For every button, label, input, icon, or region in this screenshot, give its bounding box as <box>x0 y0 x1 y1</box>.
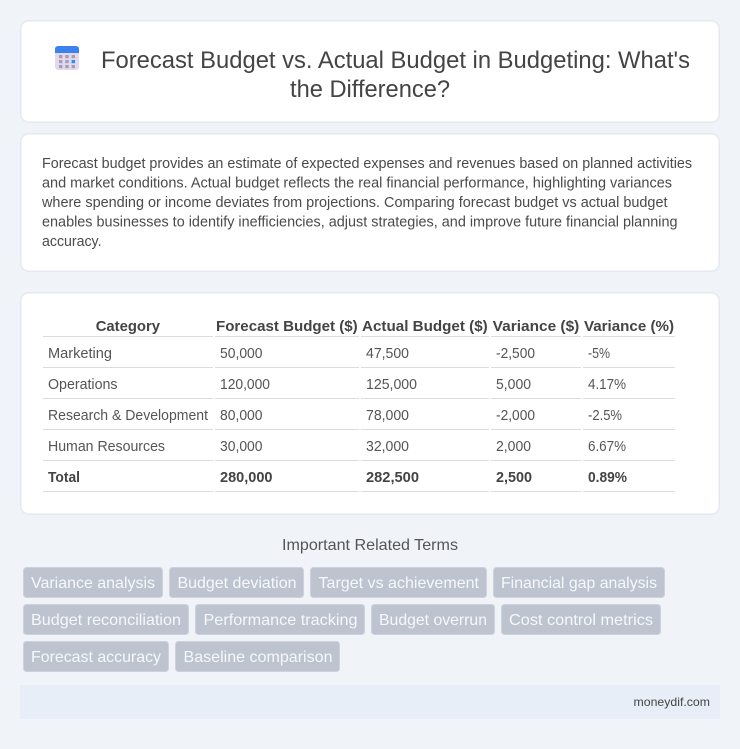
summary text <box>41 156 692 250</box>
tag: forecast accuracy <box>24 642 168 672</box>
panel: related term tags <box>24 568 664 672</box>
footer: moneydif.com <box>634 695 710 709</box>
row: operations: 125,000 <box>366 377 417 393</box>
panel: title header <box>21 21 719 122</box>
row: marketing: -5% <box>588 346 610 362</box>
row: human resources <box>48 439 626 455</box>
table header row: Variance ($) <box>493 318 579 335</box>
row: research and development <box>48 408 622 424</box>
summary text: accuracy. <box>42 234 102 250</box>
row: operations: 120,000 <box>220 377 270 393</box>
summary text: and market conditions. Actual budget reflects the real financial performance, highlighting variances <box>42 176 672 192</box>
tag: target vs achievement <box>310 568 486 598</box>
tag: budget overrun <box>372 604 494 634</box>
tag: baseline comparison: Baseline comparison <box>184 649 332 666</box>
title: the Difference? <box>290 76 450 103</box>
row: research and development: Research & Development <box>48 408 208 424</box>
table header row: Variance (%) <box>584 318 674 335</box>
panel: budget table <box>21 293 719 514</box>
tag: performance tracking <box>196 604 364 634</box>
heading: related terms: Important Related Terms <box>282 537 458 554</box>
row: operations: Operations <box>48 377 118 393</box>
row: human resources: Human Resources <box>48 439 165 455</box>
tag: budget reconciliation: Budget reconciliation <box>31 612 181 629</box>
table header row <box>96 318 674 335</box>
row: operations: 4.17% <box>588 377 626 393</box>
row: human resources: 30,000 <box>220 439 262 455</box>
table header row: Forecast Budget ($) <box>216 318 358 335</box>
tag: variance analysis: Variance analysis <box>31 575 155 592</box>
row: research and development: 80,000 <box>220 408 262 424</box>
tag: financial gap analysis <box>494 568 664 598</box>
tag: budget reconciliation <box>24 604 188 634</box>
tag: budget deviation: Budget deviation <box>178 575 296 592</box>
title: Forecast Budget vs. Actual Budget in Budgeting: What's <box>101 47 690 74</box>
row: marketing: 47,500 <box>366 346 409 362</box>
row: human resources: 2,000 <box>496 439 531 455</box>
row: marketing: -2,500 <box>496 346 535 362</box>
tag: cost control metrics <box>502 604 660 634</box>
row: total: 2,500 <box>496 470 532 486</box>
tag: cost control metrics: Cost control metrics <box>509 612 653 629</box>
title <box>101 47 690 103</box>
row: human resources: 6.67% <box>588 439 626 455</box>
tag: budget deviation <box>170 568 304 598</box>
row: operations: 5,000 <box>496 377 531 393</box>
table header row: Category <box>96 318 161 335</box>
tag: budget overrun: Budget overrun <box>379 612 487 629</box>
tag: variance analysis <box>24 568 162 598</box>
row: marketing: Marketing <box>48 346 112 362</box>
row: research and development: -2.5% <box>588 408 622 424</box>
tag: target vs achievement: Target vs achievement <box>318 575 480 592</box>
table rule lines <box>43 336 675 492</box>
tag: forecast accuracy: Forecast accuracy <box>31 649 161 666</box>
panel: summary paragraph <box>21 134 719 271</box>
row: marketing: 50,000 <box>220 346 262 362</box>
row: total: 282,500 <box>366 470 419 486</box>
row: human resources: 32,000 <box>366 439 409 455</box>
row: operations <box>48 377 626 393</box>
row: marketing <box>48 346 610 362</box>
row: research and development: 78,000 <box>366 408 409 424</box>
row: total: 280,000 <box>220 470 272 486</box>
row: research and development: -2,000 <box>496 408 535 424</box>
summary text: enables businesses to identify inefficiencies, adjust strategies, and improve future financial planning <box>42 214 678 230</box>
tag: baseline comparison <box>176 642 340 672</box>
tag: financial gap analysis: Financial gap analysis <box>501 575 657 592</box>
row: total: Total <box>48 470 80 486</box>
row: total <box>48 470 627 486</box>
table header row: Actual Budget ($) <box>362 318 488 335</box>
tag: performance tracking: Performance tracking <box>204 612 358 629</box>
footer <box>20 685 720 719</box>
row: total: 0.89% <box>588 470 627 486</box>
summary text: where spending or income deviates from projections. Comparing forecast budget vs actual budget <box>41 195 668 211</box>
summary text: Forecast budget provides an estimate of expected expenses and revenues based on planned activities <box>42 156 692 172</box>
icon: calendar <box>55 46 79 70</box>
